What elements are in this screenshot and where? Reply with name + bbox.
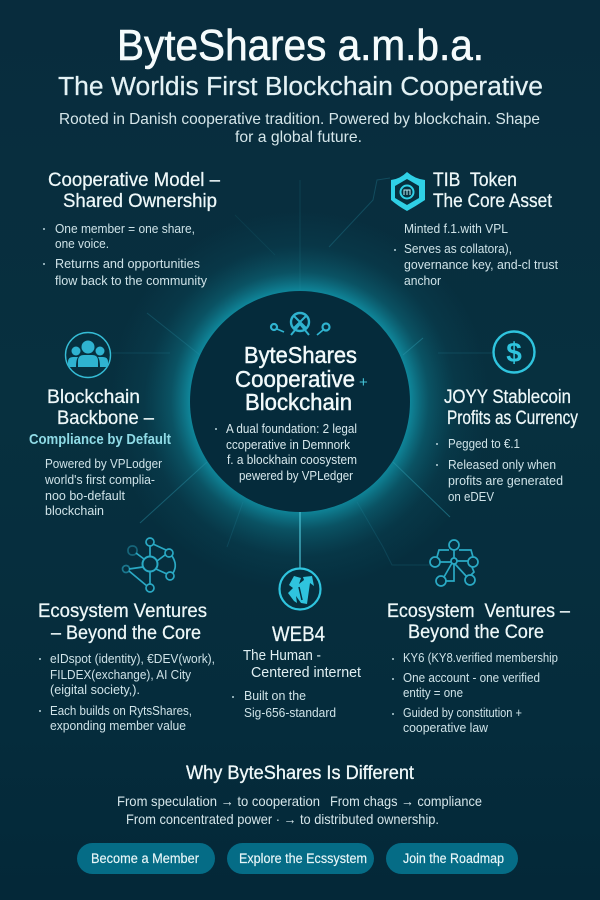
icon: dollar coin xyxy=(494,332,534,372)
icon: dollar coin: $ xyxy=(506,337,522,368)
description xyxy=(44,456,163,518)
heading: Beyond the Core xyxy=(408,622,544,643)
bullets xyxy=(39,651,215,733)
heading: TIB Token xyxy=(433,170,517,191)
button: join the roadmap: Join the Roadmap xyxy=(403,851,504,866)
center description: f. a blockhain coosystem xyxy=(227,452,357,467)
button: join the roadmap xyxy=(386,843,518,874)
bullets: on eDEV xyxy=(448,489,494,504)
center circle xyxy=(190,291,410,512)
button: become a member xyxy=(77,843,215,874)
heading: Shared Ownership xyxy=(63,191,217,212)
bullets xyxy=(43,221,207,288)
bullets: profits are generated xyxy=(448,473,563,488)
panel: JOYY stablecoin xyxy=(436,332,578,504)
bullets: Returns and opportunities xyxy=(55,256,200,271)
header xyxy=(58,21,543,146)
button: become a member: Become a Member xyxy=(91,851,199,866)
tagline: Rooted in Danish cooperative tradition. Powered by blockchain. Shape xyxy=(59,111,540,128)
panel: ecosystem ventures left xyxy=(38,538,215,733)
bullets: Sig-656-standard xyxy=(244,705,336,720)
description: Powered by VPLodger xyxy=(45,456,163,471)
bullets: exponding member value xyxy=(50,718,186,733)
heading: JOYY Stablecoin xyxy=(444,387,571,408)
bullets: governance key, and-cl trust xyxy=(404,257,558,272)
heading xyxy=(48,170,220,212)
center description: pewered by VPLedger xyxy=(239,468,354,483)
bullets xyxy=(436,436,563,504)
heading xyxy=(47,387,154,429)
bullets: cooperative law xyxy=(403,720,489,735)
panel: why different xyxy=(117,763,482,827)
bullets: Released only when xyxy=(448,457,556,472)
button: explore the ecosystem: Explore the Ecssystem xyxy=(239,851,367,866)
heading: Backbone – xyxy=(57,408,154,429)
panel: cooperative model xyxy=(43,170,220,288)
center title xyxy=(235,342,368,415)
bullets: Guided by constitution + xyxy=(403,705,522,720)
panel: TIB token xyxy=(391,170,558,288)
icon: tree network xyxy=(430,540,478,586)
bullets: anchor xyxy=(404,273,442,288)
bullets: flow back to the community xyxy=(55,273,207,288)
icon: shield token xyxy=(391,172,425,211)
tagline xyxy=(59,111,540,146)
bullets: Pegged to €.1 xyxy=(448,436,520,451)
comparison text: From concentrated power · → to distributed ownership. xyxy=(126,811,439,827)
panel: ecosystem ventures right xyxy=(387,540,570,735)
heading: WEB4 xyxy=(272,623,325,646)
title: ByteShares a.m.b.a. xyxy=(117,21,484,70)
bullets: (eigital society,). xyxy=(50,682,140,697)
comparison text: From chags → compliance xyxy=(330,793,482,809)
subtitle: The Worldis First Blockchain Cooperative xyxy=(58,73,543,101)
center description xyxy=(215,421,357,483)
button: explore the ecosystem xyxy=(227,843,374,874)
icon: hub network xyxy=(122,538,175,592)
center description: ccoperative in Demnork xyxy=(226,437,350,452)
bullets xyxy=(394,221,558,288)
connector lines xyxy=(111,178,492,568)
bullets: One account - one verified xyxy=(403,670,540,685)
center title: + xyxy=(359,374,368,391)
heading: Ecosystem Ventures – xyxy=(387,601,570,622)
bullets: entity = one xyxy=(403,685,463,700)
heading: The Core Asset xyxy=(433,191,553,212)
subheading: Centered internet xyxy=(251,664,362,681)
subheading xyxy=(243,647,362,681)
heading xyxy=(387,601,570,643)
heading xyxy=(433,170,553,212)
icon: center cooperative wheel xyxy=(271,313,330,335)
heading: Blockchain xyxy=(47,387,140,408)
comparison text xyxy=(117,793,482,827)
bullets: one voice. xyxy=(55,236,109,251)
description: blockchain xyxy=(45,503,104,518)
central glow xyxy=(110,211,490,591)
bullets xyxy=(392,650,558,735)
icon: WEB4 emblem xyxy=(280,568,320,610)
heading: Ecosystem Ventures xyxy=(38,601,207,622)
bullets: eIDspot (identity), €DEV(work), xyxy=(50,651,215,666)
description: noo bo-default xyxy=(45,488,125,503)
subheading: The Human - xyxy=(243,647,321,664)
center title: ByteShares xyxy=(244,342,357,368)
heading: Why ByteShares Is Different xyxy=(186,763,415,784)
tagline: for a global future. xyxy=(235,129,362,146)
bullets: One member = one share, xyxy=(55,221,195,236)
heading xyxy=(38,601,207,644)
center description: A dual foundation: 2 legal xyxy=(226,421,357,436)
panel: WEB4 xyxy=(232,568,362,720)
heading xyxy=(444,387,578,429)
icon: people xyxy=(66,332,110,378)
bullets: KY6 (KY8.verified membership xyxy=(403,650,558,665)
comparison text: From speculation → to cooperation xyxy=(117,793,320,809)
bullets: FILDEX(exchange), AI City xyxy=(50,667,191,682)
bullets xyxy=(232,688,336,720)
bullets: Minted f.1.with VPL xyxy=(404,221,508,236)
bullets: Built on the xyxy=(244,688,306,703)
description: world's first complia- xyxy=(44,472,155,487)
panel: blockchain backbone xyxy=(29,332,171,518)
bullets: Serves as collatora), xyxy=(404,241,512,256)
center title: Blockchain xyxy=(245,389,352,415)
heading: Cooperative Model – xyxy=(48,170,220,191)
center title: Cooperative xyxy=(235,366,355,392)
heading: – Beyond the Core xyxy=(51,623,201,644)
subheading: Compliance by Default xyxy=(29,431,171,448)
bullets: Each builds on RytsShares, xyxy=(50,703,192,718)
